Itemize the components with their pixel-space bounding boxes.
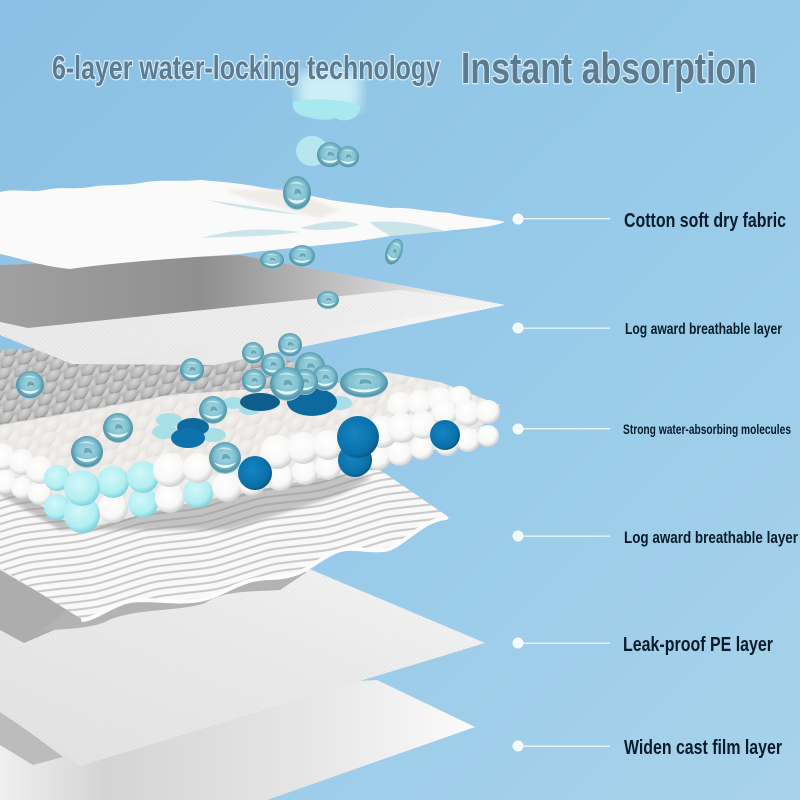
- grey upper sphere surface: [0, 338, 345, 430]
- layer 4: wavy breathable layer: [0, 470, 450, 620]
- callout: cotton soft dry fabric: [512, 209, 786, 232]
- callout: log award breathable layer 2: [512, 529, 798, 547]
- layer 5: leak-proof PE layer: [0, 560, 485, 766]
- layer 6: widen cast film layer: [0, 680, 475, 800]
- callout: strong water-absorbing molecules: [512, 421, 791, 437]
- callout: log award breathable layer: [512, 321, 782, 338]
- large blue spheres: [238, 416, 460, 490]
- callout: widen cast film layer: [512, 736, 782, 759]
- rear right spheres: [387, 386, 472, 425]
- heading: 6-layer water-locking technology: 6-layer water-locking technology: [52, 49, 440, 86]
- blue and aqua absorbing patches: [152, 388, 352, 448]
- layer 1: cotton soft dry fabric: [0, 180, 505, 269]
- white upper sphere surface: [0, 372, 500, 530]
- droplets on sphere layer: [16, 358, 241, 474]
- bottom row of spheres: [0, 425, 499, 533]
- top row of spheres: [0, 400, 500, 506]
- wet patches: [200, 200, 445, 238]
- layer 3: strong water-absorbing molecules: [0, 338, 500, 533]
- droplet cluster: [242, 333, 388, 401]
- falling water glow: [298, 72, 360, 110]
- callout: leak-proof PE layer: [512, 633, 773, 656]
- water drops: [16, 72, 407, 474]
- layer 2: breathable layer: [0, 255, 505, 365]
- droplets in air: [260, 136, 407, 309]
- falling water cloud: [293, 99, 360, 120]
